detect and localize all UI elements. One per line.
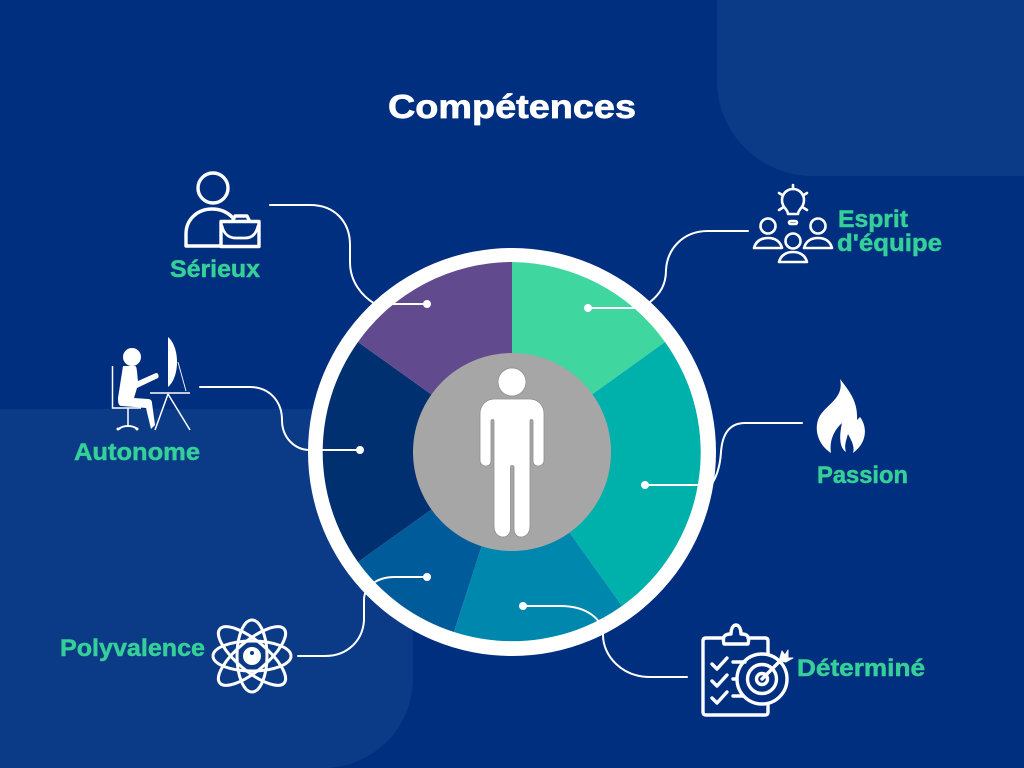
- segment: Passion: [512, 342, 701, 606]
- wheel: [308, 248, 716, 656]
- label: Esprit d'équipe: Esprit: [838, 206, 908, 233]
- connector: Autonome: [200, 387, 364, 454]
- icon: person at computer: [112, 337, 190, 430]
- label: Déterminé: Déterminé: [797, 655, 925, 682]
- connector: Polyvalence: [298, 573, 431, 656]
- label: Autonome: Autonome: [74, 439, 200, 466]
- label: Passion: Passion: [817, 462, 908, 489]
- segment: Sérieux: [358, 262, 512, 452]
- label: Polyvalence: Polyvalence: [60, 635, 205, 662]
- icon: team with light bulb: [754, 185, 832, 262]
- connector: Sérieux: [270, 205, 431, 308]
- icon: person with briefcase: [186, 173, 259, 246]
- title: Compétences: [388, 88, 636, 125]
- segment: Polyvalence: [358, 452, 512, 632]
- panel: top right background shape: [717, 0, 1024, 176]
- icon: atom: [210, 618, 294, 694]
- label: Sérieux: Sérieux: [170, 256, 261, 283]
- connector: Passion: [641, 423, 802, 489]
- connector: Déterminé: [519, 602, 687, 677]
- label: Esprit d'équipe: d'équipe: [837, 230, 942, 257]
- icon: person silhouette: [480, 368, 544, 537]
- segment: Déterminé: [454, 452, 622, 641]
- connector: Esprit d'équipe: [584, 231, 748, 312]
- icon: flame: [817, 379, 865, 453]
- panel: bottom left background shape: [0, 409, 413, 768]
- grey centre disc: [413, 353, 611, 551]
- icon: clipboard and target: [703, 625, 793, 715]
- white ring: [308, 248, 716, 656]
- segment: Esprit d'équipe: [512, 262, 665, 452]
- label: Esprit d'équipe: [837, 206, 942, 257]
- segment: Autonome: [323, 342, 512, 562]
